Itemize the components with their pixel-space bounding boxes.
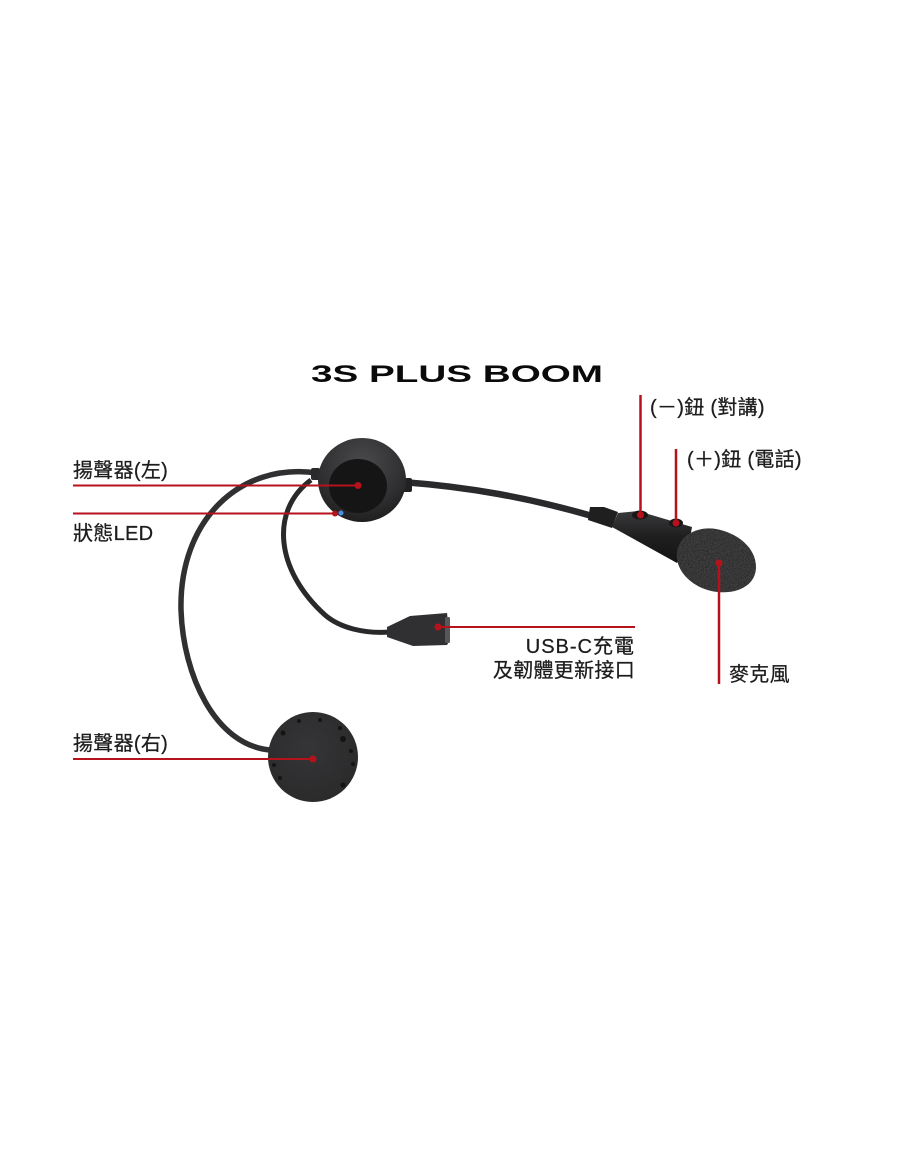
callout: status LED xyxy=(73,510,338,545)
callout: speaker left xyxy=(73,459,362,489)
callout: status LED: 狀態LED xyxy=(73,522,153,545)
callout: microphone: 麥克風 xyxy=(729,663,790,686)
right speaker unit xyxy=(268,712,358,802)
microphone xyxy=(588,507,756,592)
callout: minus button xyxy=(637,395,765,518)
USB-C port xyxy=(387,613,450,646)
boom arm xyxy=(402,482,592,516)
title: 3S PLUS BOOM xyxy=(311,361,603,388)
callout: microphone xyxy=(716,560,790,686)
callout: USB-C port: USB-C充電 xyxy=(526,635,635,658)
outer cable to right speaker xyxy=(181,472,317,750)
left speaker unit xyxy=(311,438,412,522)
inner cable to USB-C port xyxy=(284,480,390,632)
callout: minus button: (－)鈕 (對講) xyxy=(650,396,765,419)
callout: plus button xyxy=(672,448,802,526)
callout: speaker left: 揚聲器(左) xyxy=(73,459,168,482)
callout: plus button: (＋)鈕 (電話) xyxy=(687,448,802,471)
callout: USB-C port xyxy=(434,624,635,682)
callout: speaker right: 揚聲器(右) xyxy=(73,732,168,755)
callout: speaker right xyxy=(73,732,316,762)
callout: USB-C port: 及韌體更新接口 xyxy=(493,659,635,682)
